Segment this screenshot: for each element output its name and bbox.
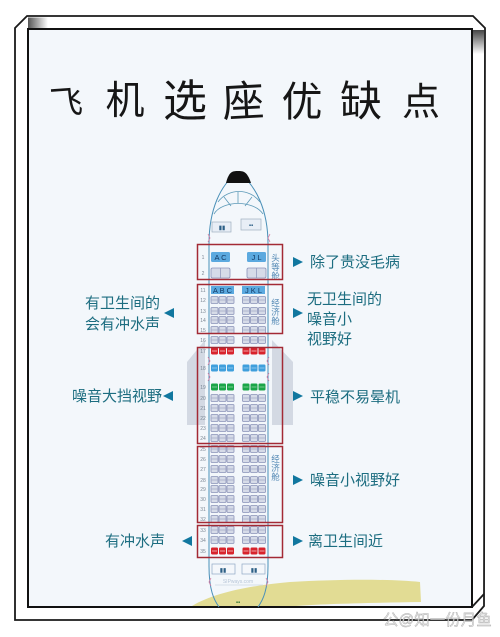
toilet and galley icons: ▮▮ xyxy=(219,226,225,232)
right annotations: 离卫生间近 xyxy=(308,533,383,550)
row numbers: 14 xyxy=(200,318,206,324)
toilet and galley icons: ▪▪ xyxy=(249,223,253,229)
cabin labels: 舱 xyxy=(271,472,280,482)
right annotations: 除了贵没毛病 xyxy=(310,254,400,271)
row numbers xyxy=(200,255,206,555)
economy seats xyxy=(211,286,266,554)
toilet and galley icons xyxy=(219,223,257,606)
title: 机 xyxy=(105,80,145,123)
title: 优 xyxy=(282,79,322,125)
row numbers: 31 xyxy=(200,507,206,513)
row numbers: 29 xyxy=(200,487,206,493)
left annotations: 噪音大挡视野 xyxy=(72,388,162,405)
left annotations xyxy=(72,295,165,550)
cabin labels: 济 xyxy=(271,307,280,317)
aircraft fuselage xyxy=(208,171,270,607)
title xyxy=(48,77,440,126)
title: 飞 xyxy=(48,83,84,122)
right annotations: 噪音小 xyxy=(307,311,352,328)
cabin labels: 舱 xyxy=(271,316,280,326)
cabin labels: 等 xyxy=(271,262,280,272)
cabin labels: 头 xyxy=(271,253,280,263)
cabin labels xyxy=(271,253,280,482)
row numbers: 16 xyxy=(200,338,206,344)
row numbers: 34 xyxy=(200,538,206,544)
cabin labels: 经 xyxy=(271,454,280,464)
title: 点 xyxy=(402,82,440,124)
toilet and galley icons: ▮▮ xyxy=(220,568,226,574)
row numbers: 24 xyxy=(200,436,206,442)
right annotations: 平稳不易晕机 xyxy=(310,389,400,406)
toilet and galley icons: ▪▪ xyxy=(236,600,240,606)
toilet and galley icons: SIPways.com xyxy=(223,579,253,585)
toilet and galley icons: ▮▮ xyxy=(251,568,257,574)
row numbers: 30 xyxy=(200,497,206,503)
first class seats: A C xyxy=(214,253,227,262)
cabin labels: 经 xyxy=(271,298,280,308)
row numbers: 17 xyxy=(200,349,206,355)
left annotations: 会有冲水声 xyxy=(85,315,160,333)
row numbers: 26 xyxy=(200,457,206,463)
title: 缺 xyxy=(340,78,382,125)
row numbers: 23 xyxy=(200,426,206,432)
economy seats: A B C xyxy=(213,286,233,295)
left annotations: 有卫生间的 xyxy=(85,295,160,312)
first class seats: J L xyxy=(251,253,262,262)
row numbers: 27 xyxy=(200,467,206,473)
red highlight boxes xyxy=(198,244,282,558)
row numbers: 21 xyxy=(200,406,206,412)
cabin labels: 济 xyxy=(271,463,280,473)
row numbers: 25 xyxy=(200,447,206,453)
left annotations: 有冲水声 xyxy=(105,532,165,550)
right annotations: 噪音小视野好 xyxy=(310,472,400,489)
right annotations: 无卫生间的 xyxy=(307,291,382,308)
title: 座 xyxy=(221,77,265,126)
row numbers: 19 xyxy=(200,385,206,391)
row numbers: 33 xyxy=(200,528,206,534)
wings xyxy=(187,340,293,425)
row numbers: 11 xyxy=(200,288,206,294)
row numbers: 1 xyxy=(202,255,205,261)
row numbers: 12 xyxy=(200,298,206,304)
row numbers: 35 xyxy=(200,549,206,555)
yellow highlight stroke xyxy=(192,580,421,606)
row numbers: 18 xyxy=(200,366,206,372)
row numbers: 22 xyxy=(200,416,206,422)
row numbers: 13 xyxy=(200,309,206,315)
right annotations: 视野好 xyxy=(307,331,352,348)
title: 选 xyxy=(163,77,207,126)
economy seats: J K L xyxy=(245,286,262,295)
row numbers: 28 xyxy=(200,478,206,484)
watermark: 公@知一份月鱼 xyxy=(383,611,492,629)
row numbers: 20 xyxy=(200,396,206,402)
row numbers: 15 xyxy=(200,328,206,334)
first class seats xyxy=(211,252,266,278)
cabin labels: 舱 xyxy=(271,271,280,281)
arrows xyxy=(163,257,303,546)
right annotations xyxy=(307,254,400,550)
row numbers: 32 xyxy=(200,517,206,523)
row numbers: 2 xyxy=(202,271,205,277)
